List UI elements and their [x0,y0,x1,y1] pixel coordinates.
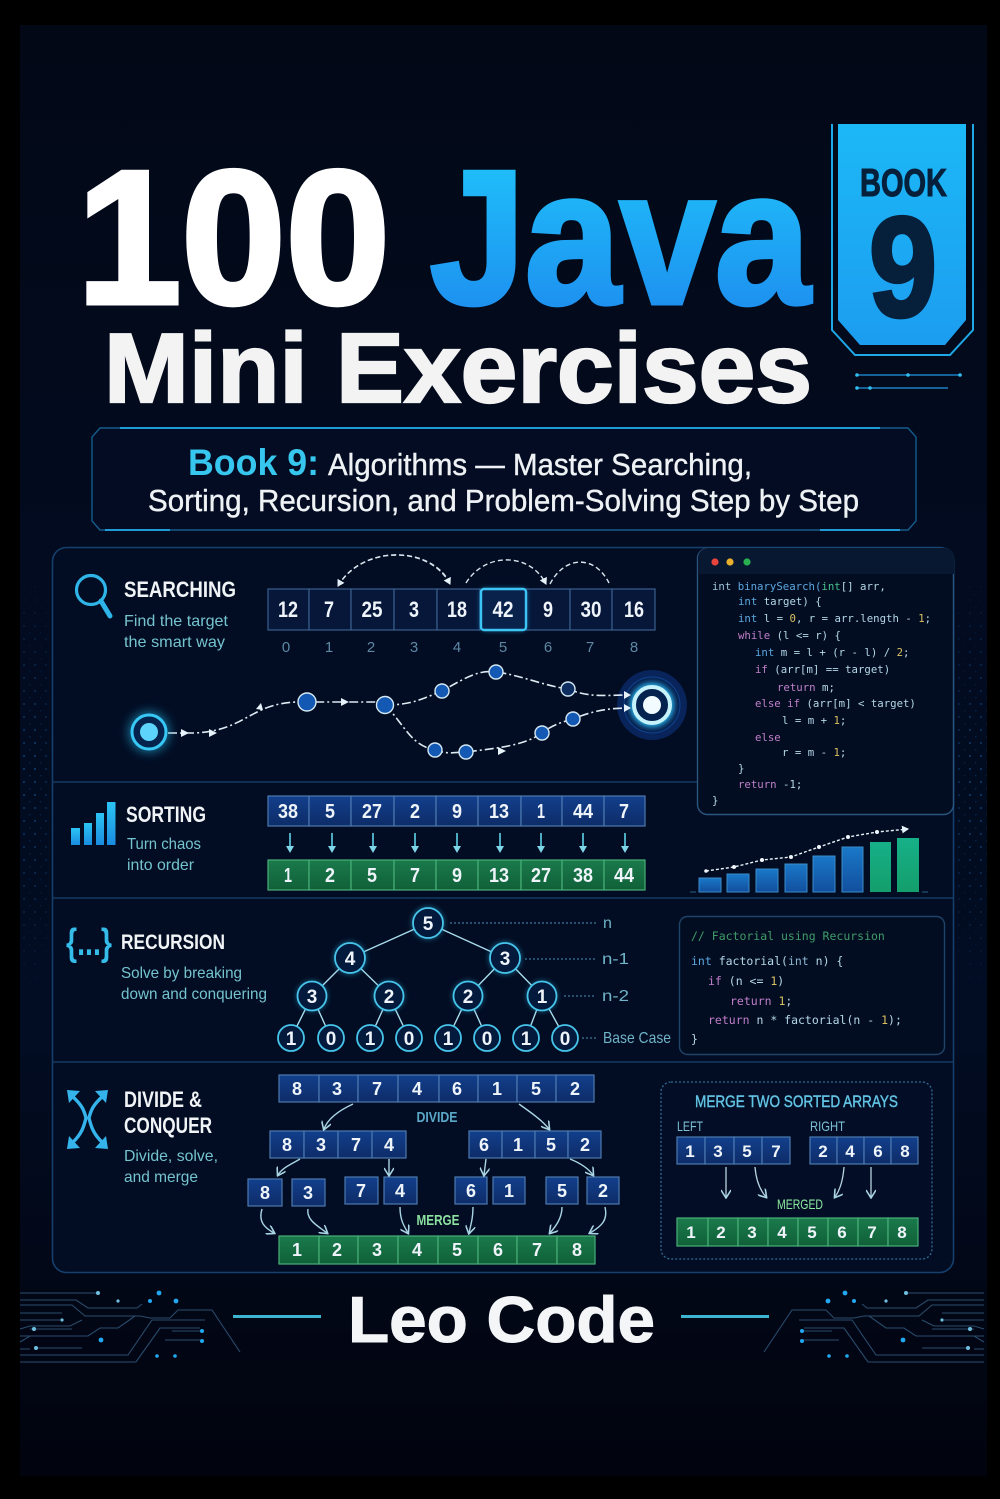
sorting description: into order [127,857,195,874]
array: sorted: 5 [367,865,377,887]
recursion tree: 0 [482,1029,492,1050]
label: divide: DIVIDE [416,1109,458,1126]
array: sorted: 9 [452,865,462,887]
array: divide level 3: 8 [260,1183,270,1203]
array indices: 8 [630,639,638,656]
sorting description: Turn chaos [127,836,201,853]
array: divide level 3: 4 [395,1181,405,1201]
array: search values: 12 [278,597,298,622]
heading: recursion: RECURSION [121,931,225,954]
recursion tree: 5 [423,914,434,935]
code text: while (l <= r) { [738,629,841,642]
section: recursion [66,907,671,1051]
array: right: 8 [900,1142,910,1161]
array: merged: 6 [837,1223,847,1242]
recursion tree: 0 [326,1029,336,1050]
array: divide level 2: 1 [513,1135,523,1155]
recursion tree: 1 [365,1029,376,1050]
array: search values: 18 [447,597,467,622]
array: unsorted: 13 [489,801,509,823]
array: divide level 2: 8 [282,1135,292,1155]
badge numeral: 9: 9 [869,188,937,347]
array: search values: 9 [543,597,553,622]
array: sorted: 13 [489,865,509,887]
heading: sorting: SORTING [126,802,206,827]
section: sorting [71,796,928,892]
array: divide input: 2 [570,1079,580,1099]
divide description: and merge [124,1169,198,1186]
heading: divide and conquer: CONQUER [124,1113,212,1138]
array: unsorted: 5 [325,801,335,823]
array: merged output: 3 [372,1240,382,1260]
recursion tree: 4 [345,949,356,970]
title: Java: Java [430,132,811,344]
array: sorted: 7 [410,865,420,887]
label: merge: MERGE [416,1212,460,1229]
array indices: 4 [453,639,461,656]
array: divide level 2: 4 [384,1135,394,1155]
array: divide level 3 [248,1177,619,1206]
factorial code text: int factorial(int n) { [691,954,843,968]
panel: merge two sorted arrays [661,1082,932,1259]
array: left: 7 [771,1142,781,1161]
tree level labels: n-2 [602,988,629,1005]
array: merged: 2 [716,1223,726,1242]
factorial code text: // Factorial using Recursion [691,929,885,943]
small path arrowheads [181,698,506,755]
recursion tree: 0 [560,1029,570,1050]
window controls [711,558,751,566]
array: sorted: 2 [325,865,335,887]
array: right: 2 [818,1142,828,1161]
searching description [124,613,229,651]
array: divide input [279,1075,594,1102]
array: divide input: 5 [531,1079,541,1099]
array indices [282,639,638,656]
author rule right [681,1315,769,1318]
array indices: 3 [410,639,418,656]
array: sorted: 1 [284,865,292,887]
recursion tree [278,907,578,1051]
code text [712,580,931,807]
array: merged: 8 [897,1223,907,1242]
recursion tree: 0 [404,1029,414,1050]
searching description: the smart way [124,634,225,651]
author: Leo Code: Leo Code [348,1283,655,1356]
array: divide level 3: 3 [303,1183,313,1203]
recursion tree: 1 [537,987,548,1008]
array indices: 7 [586,639,594,656]
array: merged output: 5 [452,1240,462,1260]
subtitle: Book 9: Book 9: [188,442,319,483]
path nodes [298,665,580,759]
icon: braces: {...} [66,922,112,964]
array: sorted: 27 [531,865,551,887]
array: unsorted [268,796,645,826]
subtitle panel [92,428,916,530]
array: divide input: 3 [332,1079,342,1099]
code text: } [712,794,718,807]
array: left: 1 [685,1142,695,1161]
array: unsorted: 1 [537,801,545,823]
heading: divide and conquer: DIVIDE & [124,1087,202,1112]
array: divide level 2 [270,1131,601,1158]
section: searching [76,555,687,759]
array: search values: 3 [409,597,419,622]
array: divide input: 7 [372,1079,382,1099]
array: merged output: 6 [493,1240,503,1260]
factorial code text: return n * factorial(n - 1); [708,1013,902,1027]
array: merged output: 1 [292,1240,302,1260]
code text: int l = 0, r = arr.length - 1; [738,612,931,625]
array: divide level 3: 1 [504,1181,514,1201]
array: left [677,1137,790,1164]
array: divide level 2: 3 [316,1135,326,1155]
title: Mini Exercises: Mini Exercises [104,313,812,423]
array: unsorted: 38 [278,801,298,823]
factorial code text: if (n <= 1) [708,974,784,988]
array: merged: 7 [867,1223,877,1242]
array: divide level 2: 5 [546,1135,556,1155]
circuit decoration left [20,1291,240,1362]
label: right: RIGHT [810,1118,845,1134]
code text: l = m + 1; [782,714,846,727]
tree level labels: n-1 [602,951,629,968]
array: merged output: 4 [412,1240,422,1260]
icon: split arrows [67,1090,108,1149]
side glow dots [23,586,987,978]
array: right: 4 [845,1142,855,1161]
array: merged output: 2 [332,1240,342,1260]
array: divide level 3: 2 [598,1181,608,1201]
recursion tree: 3 [500,949,510,970]
array: merged: 5 [807,1223,817,1242]
code text: return m; [777,681,835,694]
array: search values: 30 [580,597,602,622]
badge decoration lines [855,373,962,390]
array indices: 6 [544,639,552,656]
array: merged: 4 [777,1223,787,1242]
array: divide level 2: 2 [580,1135,590,1155]
array: unsorted: 44 [573,801,594,823]
arrows: sorting steps [290,833,625,851]
array: divide level 3: 7 [356,1181,366,1201]
searching description: Find the target [124,613,229,630]
recursion tree: 2 [384,987,394,1008]
array: merged output: 7 [532,1240,542,1260]
recursion description: down and conquering [121,986,267,1003]
start node [130,713,168,751]
array: sorted: 44 [614,865,635,887]
code text: int m = l + (r - l) / 2; [755,646,909,659]
recursion description: Solve by breaking [121,965,242,982]
icon: ascending bars [71,802,116,845]
section dividers [53,782,953,1062]
subtitle line 2: Sorting, Recursion, and Problem-Solving Step by Step [148,483,859,518]
array: search values: 7 [324,597,334,622]
author rule left [233,1315,321,1318]
code text: int target) { [738,595,822,608]
code text: int binarySearch(int[] arr, [712,580,886,593]
array: divide level 2: 6 [479,1135,489,1155]
factorial code text: return 1; [730,994,792,1008]
code text: return -1; [738,778,802,791]
divide description: Divide, solve, [124,1148,218,1165]
array: right: 6 [873,1142,883,1161]
recursion description [121,965,267,1003]
subtitle line 1: Algorithms — Master Searching, [328,447,752,482]
array: left: 3 [713,1142,723,1161]
sorting description [127,836,201,874]
code text: else if (arr[m] < target) [755,697,916,710]
label: left: LEFT [677,1118,703,1134]
array: merged output: 8 [572,1240,582,1260]
tree level labels: Base Case [603,1030,671,1047]
icon: magnifier [76,576,110,616]
divide description [124,1148,218,1186]
code text: } [738,762,744,775]
heading: searching: SEARCHING [124,577,236,602]
tree level labels: n [603,915,612,932]
factorial code text: } [691,1032,698,1046]
target node [617,670,687,740]
recursion tree: 1 [443,1029,454,1050]
code window: binary search [698,548,954,814]
array indices: 2 [367,639,375,656]
search path graph [130,665,630,759]
merge panel title: MERGE TWO SORTED ARRAYS [695,1092,898,1111]
array: merged [677,1218,918,1246]
array indices: 5 [499,639,507,656]
array: merged output [279,1236,595,1264]
heading: divide and conquer [124,1087,212,1138]
code text: r = m - 1; [782,746,846,759]
array: divide level 3: 5 [557,1181,567,1201]
array indices: 0 [282,639,290,656]
array: right [810,1137,918,1164]
array: divide input: 8 [292,1079,302,1099]
arrow: search jumps [338,555,609,586]
array: merged: 3 [747,1223,757,1242]
array: divide level 2: 7 [351,1135,361,1155]
recursion tree: 1 [521,1029,532,1050]
array: unsorted: 9 [452,801,462,823]
arrows: merge inputs [726,1167,871,1197]
array: search values: 25 [362,597,382,622]
array: divide input: 4 [412,1079,422,1099]
bar chart: growth [690,829,928,892]
tree level labels [450,915,671,1047]
code text: if (arr[m] == target) [755,663,890,676]
recursion tree: 3 [307,987,317,1008]
code window: factorial [680,916,944,1054]
arrows: divide and merge [261,1104,606,1233]
array: merged: 1 [686,1223,696,1242]
title: 100: 100 [77,132,390,344]
array: unsorted: 7 [619,801,629,823]
recursion tree: 2 [463,987,473,1008]
array: sorted [268,860,645,890]
array: divide level 3: 6 [466,1181,476,1201]
badge: Book 9 [832,124,973,355]
array: unsorted: 2 [410,801,420,823]
array: unsorted: 27 [362,801,382,823]
array: search values: 16 [624,597,644,622]
array: divide input: 6 [452,1079,462,1099]
array: search values: 42 [492,597,514,622]
array: left: 5 [742,1142,752,1161]
recursion tree: 1 [286,1029,297,1050]
array indices: 1 [325,639,333,656]
section: divide and conquer [67,1075,619,1264]
array: search values [268,589,655,630]
array: sorted: 38 [573,865,593,887]
circuit decoration right [764,1291,984,1362]
main panel [52,548,954,1272]
label: merged: MERGED [777,1196,823,1212]
factorial code text [691,929,902,1046]
badge label: BOOK: BOOK [860,162,947,205]
code text: else [755,731,781,744]
array: divide input: 1 [492,1079,502,1099]
